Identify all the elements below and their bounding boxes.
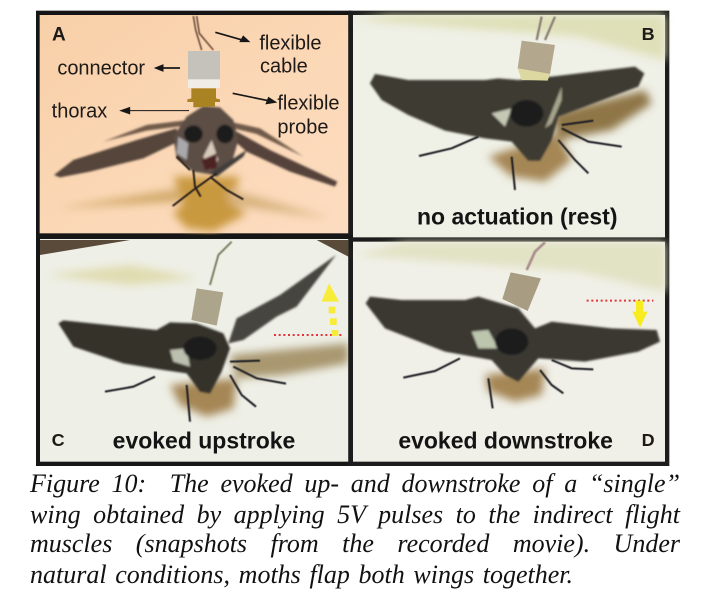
labels: cable [260,56,308,78]
yellow dashed arrow up [322,283,339,336]
caption B: no actuation (rest) [417,203,617,229]
panel B: no actuation [348,11,669,238]
labels [52,32,340,138]
labels: flexible [259,32,322,54]
panel letter A: A [52,24,66,45]
labels: probe [277,116,328,138]
figure: four photo panels [36,10,670,466]
reference line [274,332,342,338]
panel letter B: B [642,24,655,44]
panel D: evoked downstroke [348,238,669,466]
panel A: instrumented moth with labels [36,11,352,237]
panel letter D: D [642,430,655,450]
panel C: evoked upstroke [36,235,353,466]
caption C: evoked upstroke [113,427,295,453]
figure caption: muscles (snapshots from the recorded movie). Under [30,529,680,558]
pointer lines [122,32,275,113]
figure caption: natural conditions, moths flap both wings together. [30,560,573,589]
figure caption: Figure 10: The evoked up- and downstroke of a “single” [30,469,680,498]
labels: thorax [52,100,107,122]
figure caption [30,469,680,589]
yellow arrow down [632,301,648,328]
panel letter C: C [52,430,65,450]
caption D: evoked downstroke [398,427,613,453]
figure caption: wing obtained by applying 5V pulses to the indirect flight [30,500,680,529]
labels: flexible [277,92,340,114]
reference line [587,298,653,304]
labels: connector [57,58,145,80]
